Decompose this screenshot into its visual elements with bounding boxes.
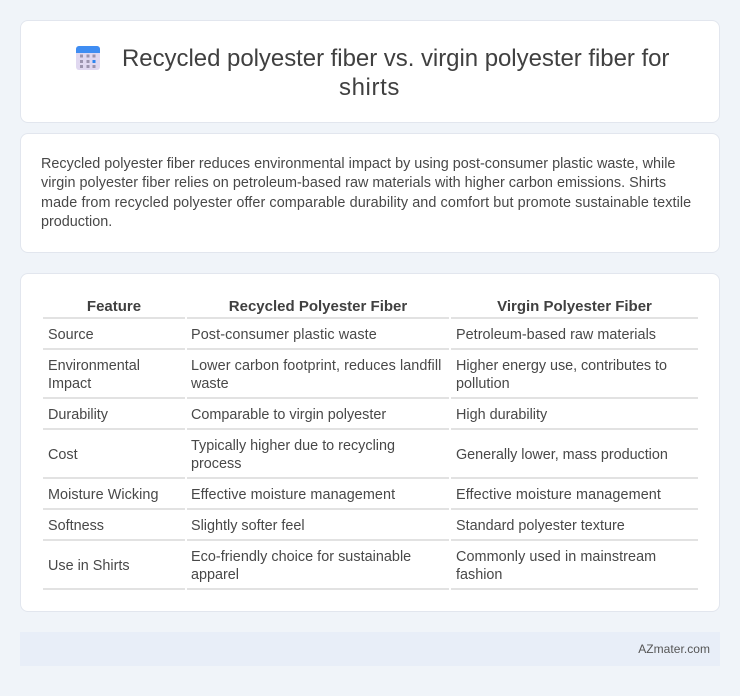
title card	[20, 20, 720, 123]
table header: Feature	[87, 298, 141, 315]
row: Cost: Typically higher due to recycling	[191, 438, 395, 454]
row: Use in Shirts: Use in Shirts	[48, 558, 130, 574]
title	[122, 45, 669, 101]
row: Cost: Cost	[48, 447, 78, 463]
footer source text: AZmater.com	[638, 642, 710, 656]
table header	[87, 298, 652, 315]
row: Use in Shirts: apparel	[191, 567, 239, 583]
intro paragraph: production.	[41, 214, 112, 230]
row: Source: Source	[48, 327, 94, 343]
intro paragraph: made from recycled polyester offer comparable durability and comfort but promote sustainable textile	[41, 195, 691, 211]
row: Use in Shirts: Commonly used in mainstream	[456, 549, 656, 565]
row: Environmental Impact: Impact	[48, 376, 91, 392]
row: Moisture Wicking	[48, 487, 661, 503]
intro paragraph: Recycled polyester fiber reduces environmental impact by using post-consumer plastic waste, while	[41, 156, 675, 172]
row: Softness: Slightly softer feel	[191, 518, 305, 534]
intro paragraph	[41, 156, 691, 230]
table header: Recycled Polyester Fiber	[229, 298, 407, 315]
row: Cost: Generally lower, mass production	[456, 447, 668, 463]
row: Use in Shirts	[48, 549, 656, 583]
row: Environmental Impact: Environmental	[48, 358, 140, 374]
row: Softness	[48, 518, 625, 534]
row: Source: Post-consumer plastic waste	[191, 327, 377, 343]
row: Softness: Softness	[48, 518, 104, 534]
row: Durability: High durability	[456, 407, 547, 423]
row: Environmental Impact: pollution	[456, 376, 510, 392]
title: shirts	[339, 74, 400, 101]
intro text card	[20, 133, 720, 253]
row: Source: Petroleum-based raw materials	[456, 327, 656, 343]
row: Moisture Wicking: Effective moisture management	[456, 487, 661, 503]
footer bar	[20, 632, 720, 666]
row: Use in Shirts: fashion	[456, 567, 502, 583]
row: Durability	[48, 407, 548, 423]
row: Softness: Standard polyester texture	[456, 518, 625, 534]
row: Environmental Impact: Higher energy use, contributes to	[456, 358, 667, 374]
comparison table card	[20, 273, 720, 612]
row: Source	[48, 327, 656, 343]
row: Durability: Comparable to virgin polyester	[191, 407, 386, 423]
row: Cost	[48, 438, 668, 472]
row: Environmental Impact: waste	[191, 376, 229, 392]
row: Environmental Impact	[48, 358, 667, 392]
row: Cost: process	[191, 456, 241, 472]
row: Moisture Wicking: Effective moisture management	[191, 487, 395, 503]
table header: Virgin Polyester Fiber	[497, 298, 652, 315]
row: Use in Shirts: Eco-friendly choice for sustainable	[191, 549, 411, 565]
icon: calendar	[76, 46, 100, 70]
row: Moisture Wicking: Moisture Wicking	[48, 487, 159, 503]
row: Durability: Durability	[48, 407, 108, 423]
intro paragraph: virgin polyester fiber relies on petroleum-based raw materials with higher carbon emissions. Shirts	[41, 175, 666, 191]
row: Environmental Impact: Lower carbon footprint, reduces landfill	[191, 358, 441, 374]
title: Recycled polyester fiber vs. virgin polyester fiber for	[122, 45, 669, 72]
